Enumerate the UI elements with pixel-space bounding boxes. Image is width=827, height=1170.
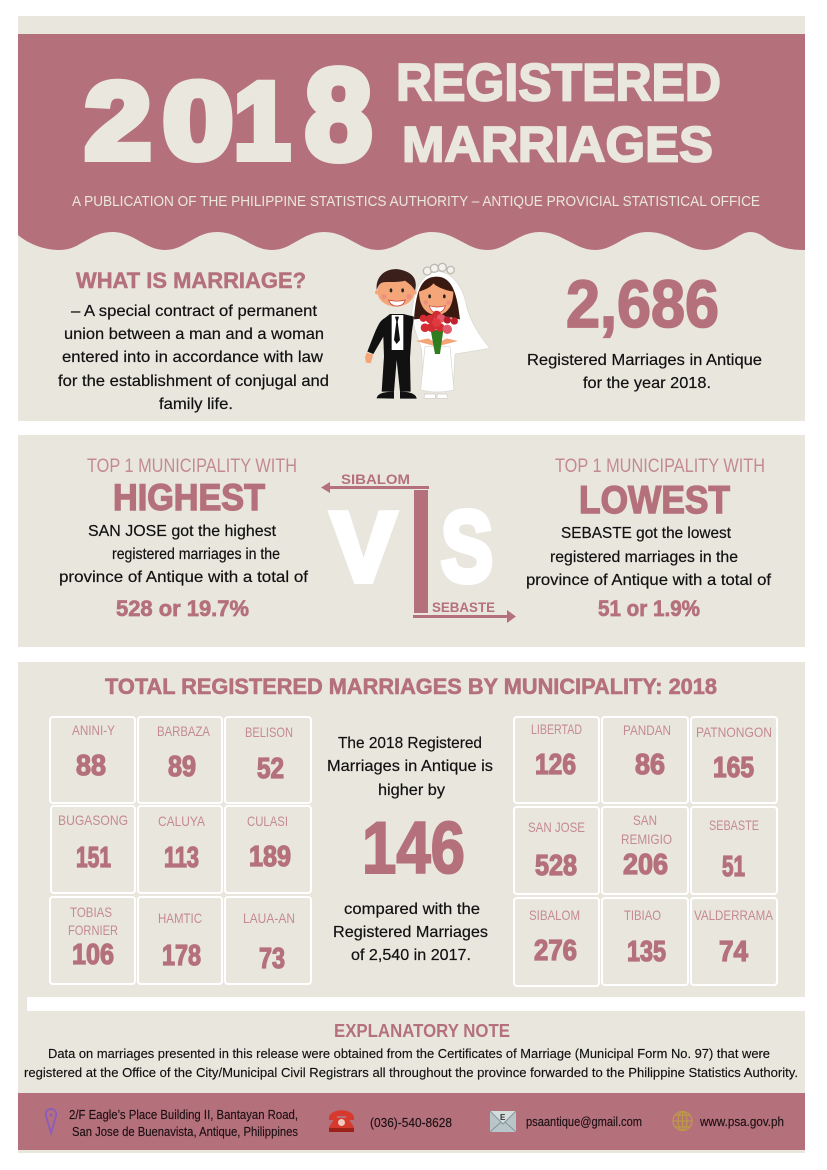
left municipality grid: HAMTIC (158, 910, 202, 926)
right municipality grid: 206 (623, 849, 668, 881)
right municipality grid: SAN (633, 812, 657, 828)
highest municipality: registered marriages in the (112, 546, 280, 563)
left municipality grid: 151 (76, 842, 111, 874)
icon: globe (673, 1112, 692, 1130)
address: San Jose de Buenavista, Antique, Philippines (72, 1125, 298, 1139)
left municipality grid: 52 (257, 753, 284, 785)
panel: highest vs lowest (18, 435, 805, 647)
left municipality grid: 89 (168, 751, 196, 783)
VS graphic (321, 471, 516, 623)
left municipality grid: 73 (259, 943, 285, 975)
icon: telephone (329, 1110, 354, 1132)
right municipality grid: 86 (635, 749, 665, 781)
website: www.psa.gov.ph (699, 1115, 784, 1129)
right municipality grid: LIBERTAD (531, 721, 582, 737)
lowest municipality: SEBASTE got the lowest (561, 525, 732, 542)
title: 2018 (85, 44, 372, 187)
heading: what is marriage: WHAT IS MARRIAGE? (76, 268, 306, 293)
left municipality grid: BELISON (245, 724, 293, 740)
icon: location pin (46, 1109, 56, 1133)
icon: envelope: E (500, 1113, 506, 1122)
big number: 2,686: 2,686 (566, 267, 719, 342)
highest municipality: province of Antique with a total of (59, 569, 309, 586)
definition text: for the establishment of conjugal and (58, 373, 329, 390)
lowest municipality: 51 or 1.9% (598, 596, 700, 621)
caption: registered marriages in Antique: for the year 2018. (583, 375, 711, 392)
right municipality grid: SAN JOSE (528, 819, 585, 835)
left edge strip (18, 997, 27, 1011)
panel: what is marriage (18, 225, 805, 421)
right municipality grid: VALDERRAMA (694, 907, 774, 923)
panel: explanatory note (18, 1011, 805, 1093)
right municipality grid: 165 (713, 752, 754, 784)
note text: Data on marriages presented in this release were obtained from the Certificates of Marriage (Municipal Form No. 97) that were (48, 1046, 770, 1061)
definition text (58, 303, 329, 413)
highest municipality (59, 456, 309, 621)
note text: registered at the Office of the City/Municipal Civil Registrars all throughout the province forwarded to the Philippine Statistics Authority. (24, 1065, 798, 1080)
center comparison callout (327, 735, 493, 964)
definition text: union between a man and a woman (64, 326, 324, 343)
title: registered marriages: MARRIAGES (402, 116, 713, 172)
left municipality grid: TOBIAS (70, 904, 112, 920)
right municipality grid: SIBALOM (529, 907, 580, 923)
definition text: – A special contract of permanent (71, 303, 318, 320)
phone number: (036)-540-8628 (370, 1116, 452, 1130)
left municipality grid: 88 (76, 750, 106, 782)
highest municipality: SAN JOSE got the highest (88, 523, 277, 540)
caption: registered marriages in Antique (527, 352, 762, 392)
right municipality grid: REMIGIO (621, 831, 672, 847)
heading: explanatory note: EXPLANATORY NOTE (334, 1021, 510, 1041)
left municipality grid: ANINI-Y (72, 722, 116, 738)
arrow: sebaste: SEBASTE (432, 599, 495, 615)
center comparison callout: Registered Marriages (333, 924, 488, 941)
right municipality grid: 528 (535, 850, 577, 882)
left municipality grid: 189 (249, 841, 291, 873)
icon: bride and groom (365, 263, 490, 399)
right municipality grid: 126 (535, 749, 576, 781)
title: 2018: 0 (163, 60, 233, 181)
right municipality grid: SEBASTE (709, 817, 759, 833)
right municipality grid (514, 717, 777, 986)
center comparison callout: of 2,540 in 2017. (351, 947, 471, 964)
address (69, 1108, 298, 1139)
header banner (18, 34, 805, 250)
right municipality grid: 276 (534, 935, 577, 967)
center comparison callout: higher by (378, 782, 445, 799)
caption: registered marriages in Antique: Registered Marriages in Antique (527, 352, 762, 369)
address: 2/F Eagle’s Place Building II, Bantayan Road, (69, 1108, 298, 1122)
heading: total registered marriages: TOTAL REGISTERED MARRIAGES BY MUNICIPALITY: 2018 (105, 674, 717, 699)
highest municipality: HIGHEST (113, 477, 265, 518)
panel: by municipality (18, 662, 805, 997)
title: 2018: 1 (234, 60, 290, 181)
left municipality grid: 113 (164, 842, 199, 874)
lowest municipality: TOP 1 MUNICIPALITY WITH (555, 456, 765, 477)
highest municipality: 528 or 19.7% (116, 596, 249, 621)
right municipality grid: PANDAN (623, 722, 671, 738)
title: 2018: 2 (85, 60, 151, 181)
lowest municipality (526, 456, 772, 621)
left municipality grid: CALUYA (158, 813, 206, 829)
left municipality grid: BUGASONG (58, 812, 128, 828)
arrow: sebaste (413, 599, 516, 623)
left municipality grid: LAUA-AN (243, 910, 295, 926)
icon: envelope (490, 1111, 516, 1132)
left municipality grid: 178 (162, 940, 201, 972)
VS graphic: V (331, 492, 396, 602)
VS graphic: S (441, 491, 493, 603)
center comparison callout: 146 (362, 808, 465, 889)
left municipality grid: BARBAZA (157, 723, 211, 739)
arrow: sibalom (321, 471, 429, 493)
left municipality grid (50, 717, 311, 984)
left municipality grid: FORNIER (68, 922, 118, 938)
right municipality grid: 135 (627, 936, 666, 968)
subtitle: A PUBLICATION OF THE PHILIPPINE STATISTICS AUTHORITY – ANTIQUE PROVICIAL STATISTICAL OFFICE (72, 193, 760, 210)
right municipality grid: 74 (719, 936, 748, 968)
right municipality grid: PATNONGON (696, 724, 772, 740)
title: registered marriages: REGISTERED (396, 54, 721, 112)
right municipality grid: TIBIAO (624, 907, 661, 923)
arrow: sibalom: SIBALOM (341, 471, 410, 487)
title: 2018: 8 (305, 44, 372, 187)
right municipality grid: 51 (722, 851, 745, 883)
definition text: family life. (159, 396, 233, 413)
email: psaantique@gmail.com (526, 1115, 642, 1129)
left municipality grid: CULASI (247, 813, 288, 829)
left municipality grid: 106 (72, 939, 114, 971)
lowest municipality: LOWEST (579, 479, 730, 522)
footer bar (18, 1093, 805, 1153)
definition text: entered into in accordance with law (62, 349, 323, 366)
center comparison callout: The 2018 Registered (338, 735, 482, 752)
center comparison callout: compared with the (344, 901, 480, 918)
top strip (18, 16, 805, 34)
lowest municipality: registered marriages in the (550, 549, 738, 566)
title: registered marriages (396, 54, 721, 172)
center comparison callout: Marriages in Antique is (327, 758, 493, 775)
note text (24, 1046, 798, 1080)
lowest municipality: province of Antique with a total of (526, 572, 772, 589)
highest municipality: TOP 1 MUNICIPALITY WITH (87, 456, 297, 477)
